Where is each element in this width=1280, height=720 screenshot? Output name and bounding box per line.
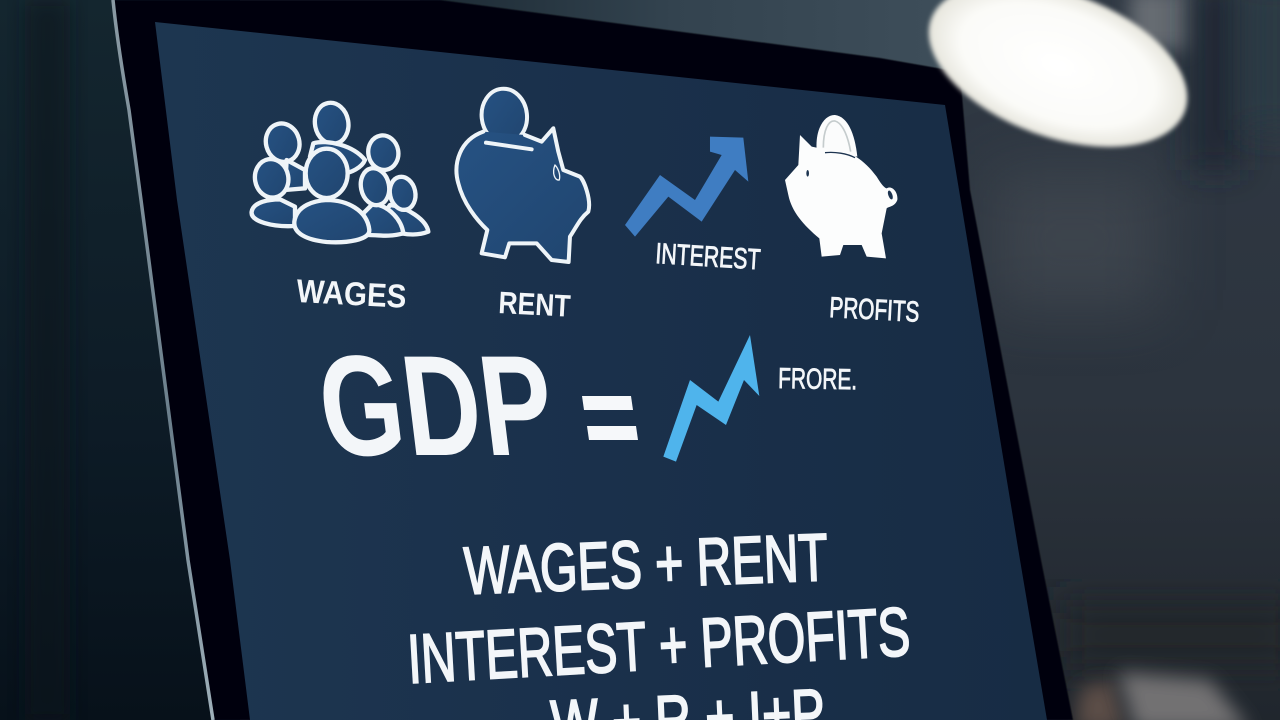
formula line 2: INTEREST + PROFITS [406,593,912,698]
desk lamp [907,0,1209,179]
icon: rising arrow (interest) [625,137,748,237]
label: profits: PROFITS [829,292,920,329]
icon: group of people (wages) [252,100,428,242]
laptop rim highlight [113,0,213,720]
icon: piggy bank outline (rent) [456,86,589,262]
label: rent: RENT [498,285,571,324]
formula line 1: WAGES + RENT [463,520,829,609]
icon: white piggy bank (profits) [785,115,897,258]
laptop screen [155,22,1047,720]
label: frore: FRORE. [778,363,857,396]
label: wages: WAGES [296,272,407,315]
label: interest: INTEREST [655,238,762,276]
heading: GDP: GDP [310,326,562,486]
pig eye [554,165,560,180]
laptop bezel [113,0,1073,720]
icon: zigzag arrow [663,335,759,462]
equals sign [582,396,638,440]
